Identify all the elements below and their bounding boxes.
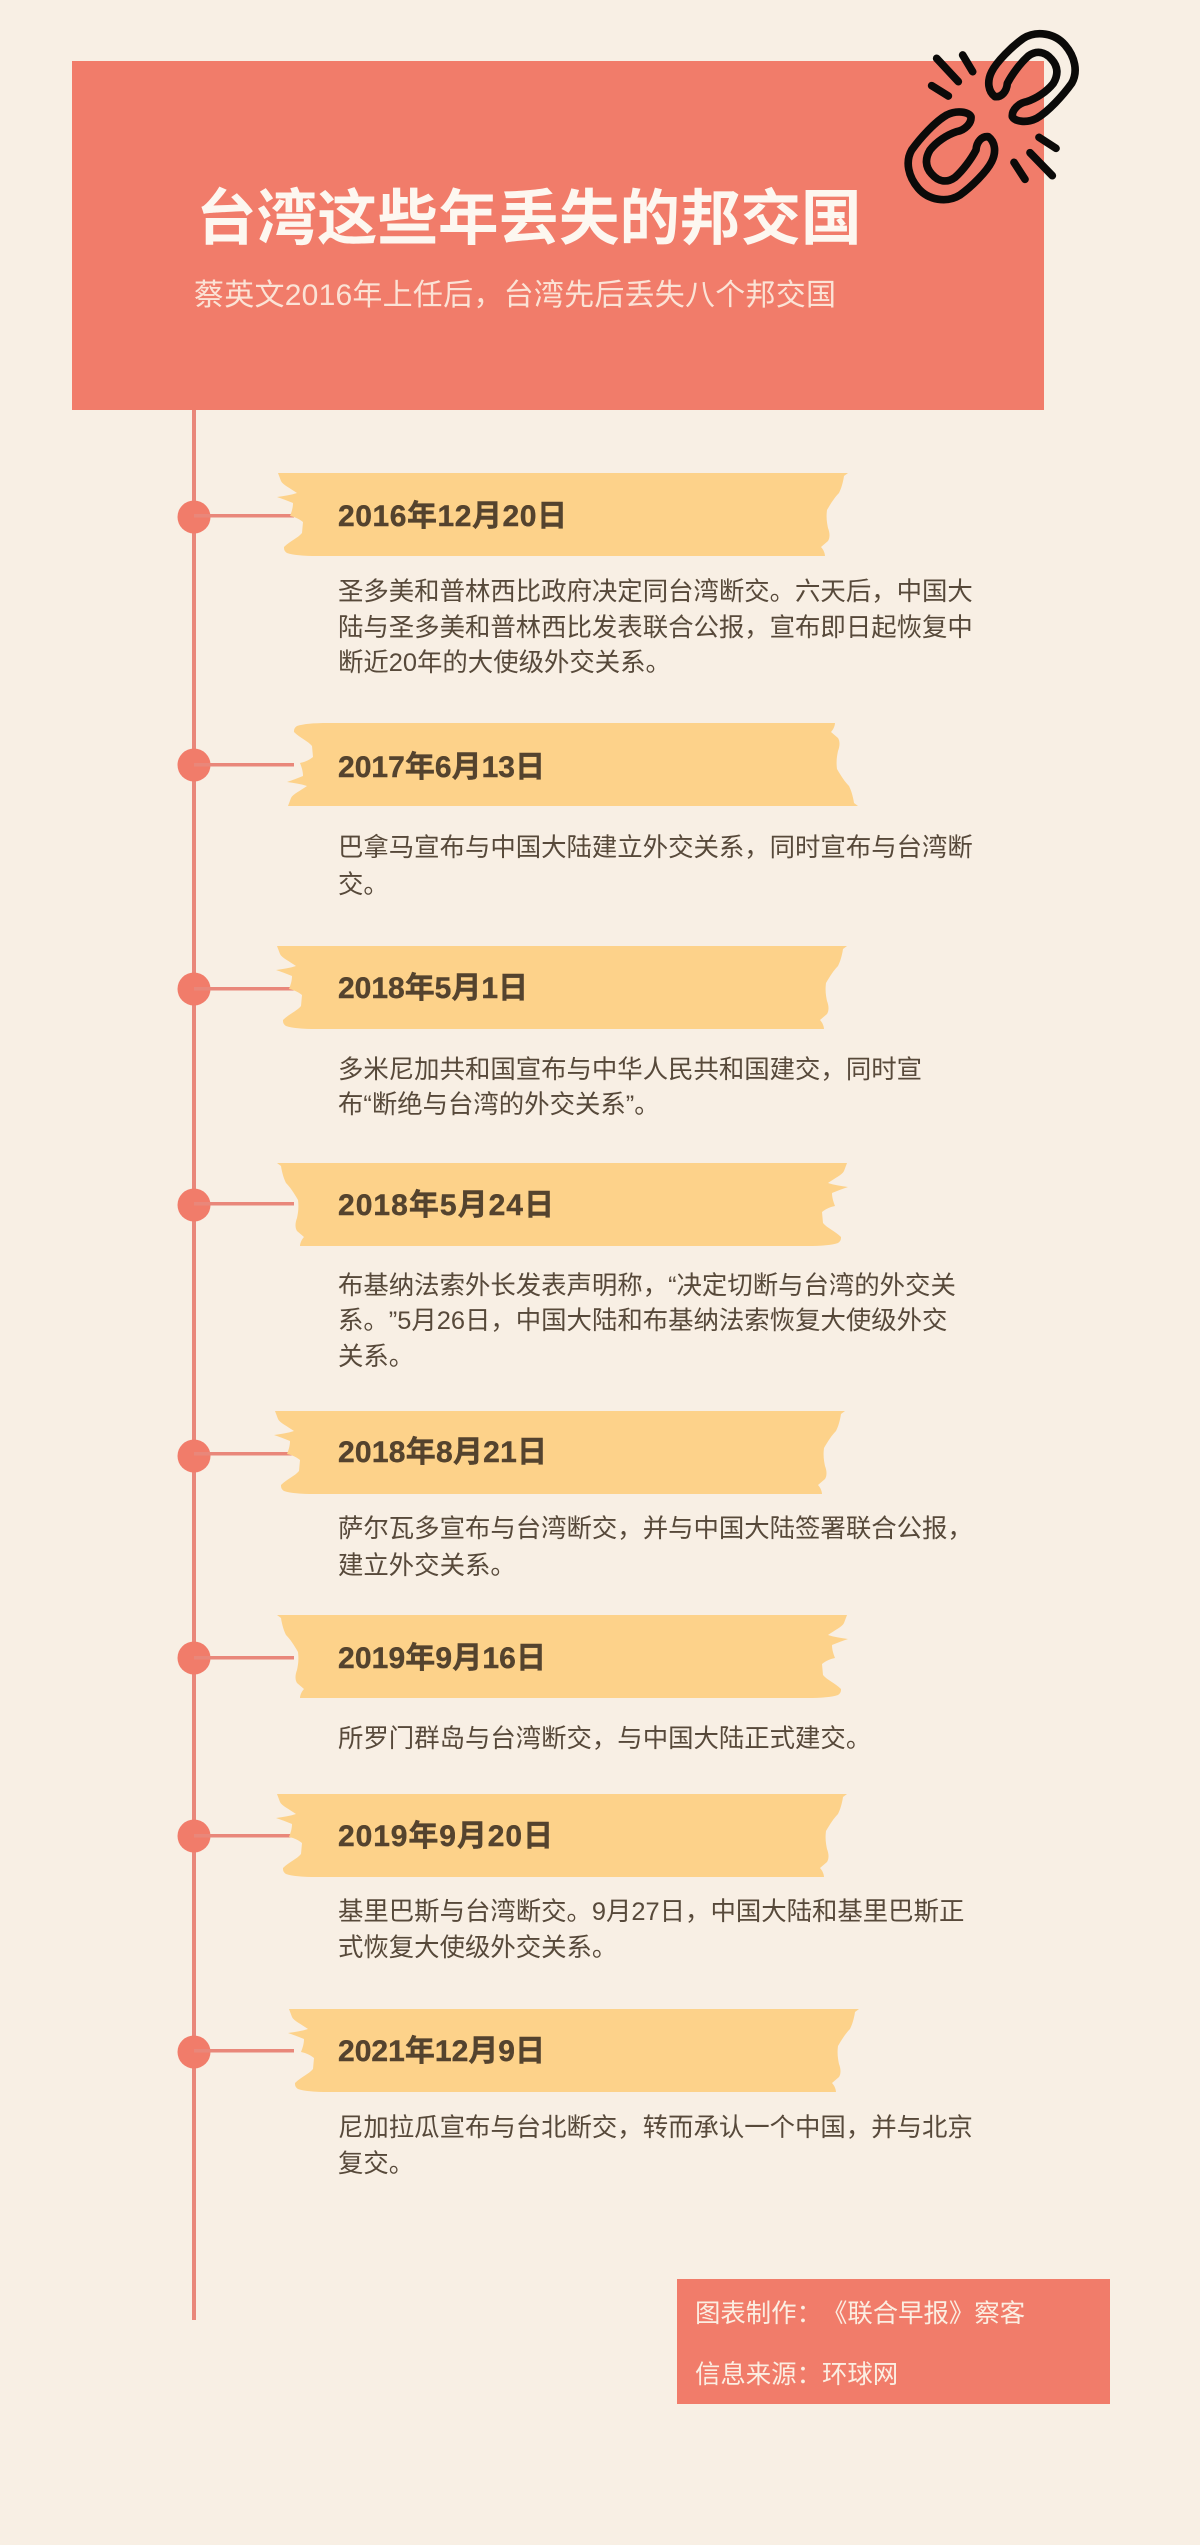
event: 2018年5月1日 — [178, 946, 922, 1119]
event: 2018年8月21日: 建立外交关系。 — [338, 1552, 516, 1580]
header panel — [72, 61, 1044, 410]
event: 2018年5月1日: 多米尼加共和国宣布与中华人民共和国建交，同时宣 — [338, 1056, 922, 1084]
event: 2018年5月24日: 系。”5月26日，中国大陆和布基纳法索恢复大使级外交 — [338, 1307, 947, 1335]
event: 2016年12月20日: 陆与圣多美和普林西比发表联合公报，宣布即日起恢复中 — [338, 614, 973, 642]
event: 2021年12月9日 — [178, 2009, 973, 2178]
subtitle: 蔡英文2016年上任后，台湾先后丢失八个邦交国 — [194, 279, 836, 312]
event: 2018年5月24日: 关系。 — [338, 1343, 414, 1371]
event: 2016年12月20日: 2016年12月20日 — [338, 500, 567, 533]
event: 2019年9月20日: 基里巴斯与台湾断交。9月27日，中国大陆和基里巴斯正 — [338, 1898, 964, 1926]
icon: broken chain link — [908, 34, 1075, 200]
event: 2017年6月13日: 交。 — [338, 871, 389, 899]
event: 2018年8月21日: 2018年8月21日 — [338, 1436, 547, 1469]
timeline axis — [192, 410, 196, 2320]
title: 台湾这些年丢失的邦交国 — [196, 184, 862, 252]
event: 2018年5月24日: 2018年5月24日 — [338, 1189, 554, 1222]
event: 2017年6月13日: 2017年6月13日 — [338, 751, 545, 784]
event: 2021年12月9日: 尼加拉瓜宣布与台北断交，转而承认一个中国，并与北京 — [338, 2114, 973, 2142]
event: 2018年8月21日 — [178, 1411, 973, 1580]
event: 2018年5月1日: 2018年5月1日 — [338, 972, 528, 1005]
event: 2019年9月16日 — [178, 1615, 871, 1753]
event: 2018年8月21日: 萨尔瓦多宣布与台湾断交，并与中国大陆签署联合公报， — [338, 1515, 973, 1543]
event: 2021年12月9日: 复交。 — [338, 2150, 414, 2178]
event: 2016年12月20日 — [178, 473, 973, 677]
credits box — [677, 2279, 1110, 2404]
event: 2019年9月20日: 2019年9月20日 — [338, 1820, 553, 1853]
credits box: 信息来源：环球网 — [695, 2361, 898, 2389]
event: 2017年6月13日: 巴拿马宣布与中国大陆建立外交关系，同时宣布与台湾断 — [338, 834, 973, 862]
event: 2018年5月24日: 布基纳法索外长发表声明称，“决定切断与台湾的外交关 — [338, 1272, 956, 1300]
event: 2021年12月9日: 2021年12月9日 — [338, 2035, 545, 2068]
event: 2019年9月16日: 2019年9月16日 — [338, 1642, 546, 1675]
event: 2019年9月20日: 式恢复大使级外交关系。 — [338, 1934, 617, 1962]
event: 2016年12月20日: 圣多美和普林西比政府决定同台湾断交。六天后，中国大 — [338, 578, 973, 606]
event: 2018年5月1日: 布“断绝与台湾的外交关系”。 — [338, 1091, 660, 1119]
event: 2018年5月24日 — [178, 1163, 956, 1371]
event: 2019年9月16日: 所罗门群岛与台湾断交，与中国大陆正式建交。 — [338, 1725, 871, 1753]
credits box: 图表制作：《联合早报》察客 — [695, 2300, 1025, 2328]
event: 2016年12月20日: 断近20年的大使级外交关系。 — [338, 649, 671, 677]
event: 2019年9月20日 — [178, 1794, 964, 1962]
event: 2017年6月13日 — [178, 723, 973, 899]
